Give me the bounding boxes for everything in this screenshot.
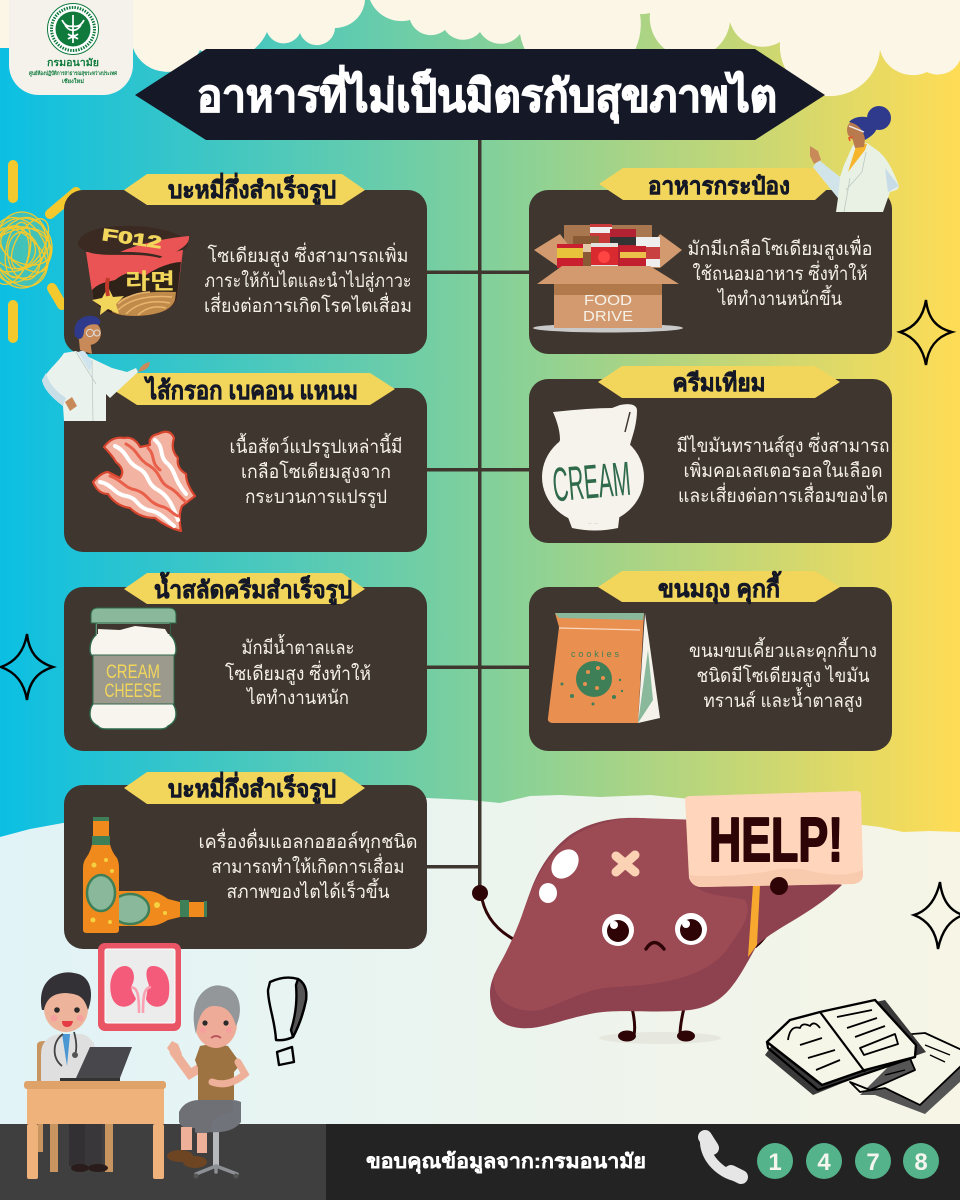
back book [850, 1033, 960, 1114]
icon: food drive box: DRIVE [583, 308, 633, 325]
panel: processed meat [64, 373, 427, 552]
icon: cream jug: CREAM [550, 453, 633, 512]
body text: ใช้ถนอมอาหาร ซึ่งทำให้ [692, 260, 868, 285]
arm across body [212, 1062, 245, 1084]
body text [204, 242, 412, 317]
title banner [135, 49, 825, 140]
footer bar [0, 1124, 960, 1200]
icon: hand-drawn exclamation mark [268, 978, 306, 1065]
hotline number 1478: 1 [768, 1149, 782, 1176]
body text: เครื่องดื่มแอลกอฮอล์ทุกชนิด [198, 828, 418, 854]
icon: beer bottles [83, 817, 207, 933]
body text: สภาพของไตได้เร็วขึ้น [226, 878, 390, 903]
body text: กระบวนการแปรรูป [245, 487, 387, 508]
body text: ไตทำงานหนักขึ้น [716, 285, 842, 310]
logo text [29, 57, 117, 85]
hotline number 1478: 8 [914, 1149, 928, 1176]
icon: bacon [93, 432, 195, 531]
body text: โซเดียมสูง ซึ่งทำให้ [225, 660, 371, 685]
body text: สามารถทำให้เกิดการเสื่อม [212, 853, 404, 878]
illustration: female scientist [810, 106, 899, 212]
body text: มักมีเกลือโซเดียมสูงเพื่อ [688, 235, 872, 260]
help sign [685, 791, 863, 887]
bandage [616, 855, 635, 872]
illustration: elderly patient on stool [167, 985, 245, 1178]
panel: salad cream [64, 571, 427, 751]
eyes and mouth [602, 913, 707, 949]
footer credit: ขอบคุณข้อมูลจาก:กรมอนามัย [366, 1150, 646, 1175]
heading ribbon [599, 168, 833, 200]
heading ribbon: อาหารกระป๋อง [648, 173, 790, 200]
kidneys [110, 966, 169, 1013]
logo badge [9, 0, 133, 95]
clouds [0, 0, 960, 96]
front book [765, 1000, 926, 1095]
body text: ภาระให้กับไตและนำไปสู่ภาวะ [204, 270, 412, 292]
icon: kidney sign [98, 943, 181, 1031]
heading ribbon: ครีมเทียม [672, 370, 766, 397]
heading ribbon: ขนมถุง คุกกี้ [658, 570, 782, 605]
legs and shoes [69, 1124, 108, 1172]
illustration: sad liver character [472, 791, 863, 1044]
coat [41, 1034, 97, 1082]
arm raised [174, 1052, 200, 1074]
body text: เกลือโซเดียมสูงจาก [241, 460, 391, 483]
raised hand [770, 877, 788, 895]
heading ribbon: ไส้กรอก เบคอน แหนม [143, 375, 358, 405]
arms and legs [481, 890, 780, 1035]
icon: cream cheese jar [90, 608, 176, 729]
heading ribbon: น้ำสลัดครีมสำเร็จรูป [154, 571, 352, 605]
icon: cream jug [542, 404, 644, 530]
shoes [167, 1150, 207, 1168]
heading ribbon [124, 771, 365, 804]
logo text: เชียงใหม่ [62, 77, 84, 85]
panel: instant noodles [64, 172, 427, 354]
body text: โซเดียมสูง ซึ่งสามารถเพิ่ม [208, 242, 408, 267]
body text: ชนิดมีโซเดียมสูง ไขมัน [696, 664, 870, 687]
heading ribbon [124, 172, 365, 205]
icon: food drive box [533, 224, 683, 332]
trousers [179, 1100, 233, 1134]
heading ribbon [124, 571, 365, 605]
icon: cookie bag: cookies [571, 649, 620, 659]
hotline number 1478: 7 [866, 1149, 880, 1176]
hotline number 1478: 4 [817, 1149, 831, 1176]
stool [194, 1100, 241, 1178]
help sign: HELP! [709, 806, 843, 875]
heading ribbon [598, 366, 840, 398]
icon: phone [705, 1137, 741, 1177]
head [41, 972, 91, 1032]
star: right lower [914, 882, 960, 949]
shadow under liver [599, 1032, 721, 1044]
liver body [490, 818, 842, 1028]
panel: non-dairy creamer [529, 366, 892, 543]
panel: canned food [529, 168, 892, 354]
body text: มักมีน้ำตาลและ [242, 634, 354, 659]
icon: noodle cup [78, 225, 189, 316]
central connector lines [427, 140, 529, 890]
body text: ทรานส์ และน้ำตาลสูง [704, 687, 862, 712]
icon: cream cheese jar: CHEESE [104, 681, 162, 702]
icon: food drive box: FOOD [584, 292, 632, 309]
torn paper lower background [0, 795, 960, 1124]
logo emblem [48, 4, 98, 54]
laptop [60, 1047, 132, 1081]
body text: ไตทำงานหนัก [245, 687, 349, 709]
head [194, 985, 240, 1048]
body text [198, 828, 418, 903]
illustration: male scientist [42, 316, 150, 421]
star: right upper [900, 300, 952, 365]
illustration: open books [765, 1000, 960, 1114]
panel: snacks and cookies [529, 570, 892, 751]
illustration: doctor at desk [24, 972, 166, 1179]
body text [230, 433, 402, 508]
chair [37, 1041, 113, 1172]
panel: alcohol [64, 771, 427, 949]
icon: cream cheese jar: CREAM [106, 662, 160, 683]
heading ribbon: บะหมี่กึ่งสำเร็จรูป [168, 172, 336, 205]
logo text: ศูนย์ห้องปฏิบัติการสาธารณสุขระหว่างประเทศ [29, 69, 117, 78]
lower legs [181, 1127, 207, 1153]
star: left middle [1, 634, 53, 700]
body text: เนื้อสัตว์แปรรูปเหล่านี้มี [230, 433, 402, 458]
body text: ขนมขบเคี้ยวและคุกกี้บาง [689, 637, 877, 663]
body text [688, 235, 872, 310]
hotline number 1478 [757, 1143, 939, 1179]
heading ribbon: บะหมี่กึ่งสำเร็จรูป [168, 771, 336, 804]
icon: noodle cup: 라면 [125, 269, 175, 294]
body text [225, 634, 371, 709]
body text: มีไขมันทรานส์สูง ซึ่งสามารถ [676, 432, 890, 457]
body text: และเสี่ยงต่อการเสื่อมของไต [678, 482, 888, 507]
icon: yellow sun doodle [0, 165, 76, 338]
icon: cookie bag [548, 613, 660, 723]
desk [24, 1081, 166, 1179]
icon: noodle cup: F012 [101, 225, 163, 252]
body text [689, 637, 877, 712]
heading ribbon [598, 570, 840, 605]
body text: เสี่ยงต่อการเกิดโรคไตเสื่อม [204, 292, 412, 317]
sign stick [748, 885, 760, 957]
title: อาหารที่ไม่เป็นมิตรกับสุขภาพไต [197, 65, 777, 124]
liver highlights [539, 844, 584, 903]
torso [195, 1044, 241, 1100]
body text: เพิ่มคอเลสเตอรอลในเลือด [684, 457, 882, 482]
logo text: กรมอนามัย [47, 57, 99, 69]
body text [676, 432, 890, 507]
